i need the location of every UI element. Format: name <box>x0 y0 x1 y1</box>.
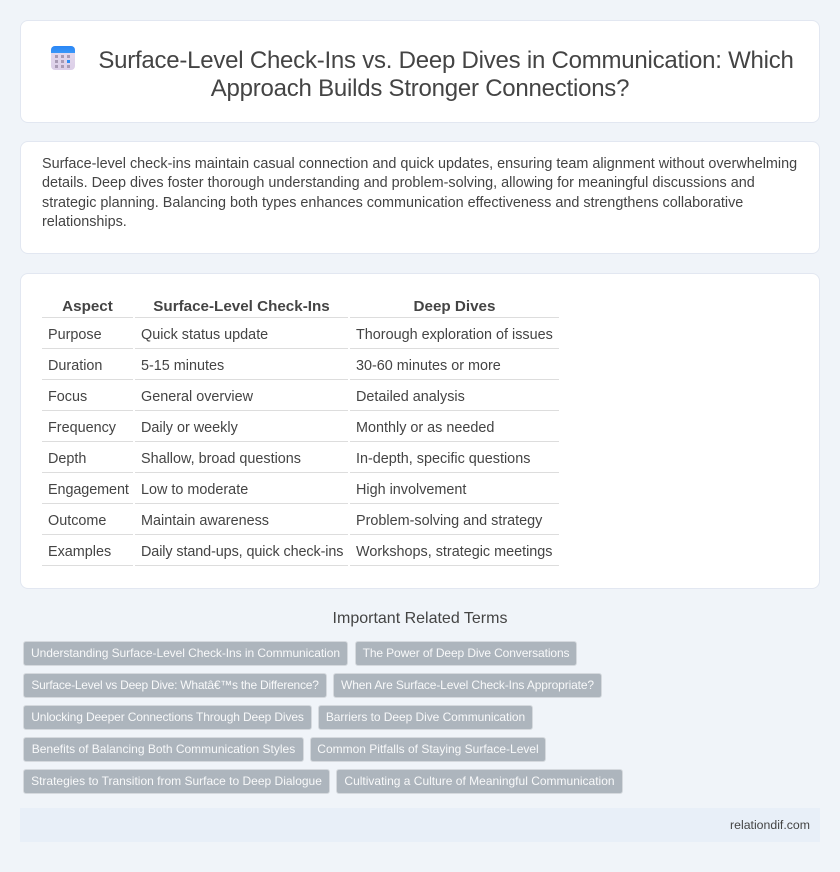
tag <box>336 769 623 794</box>
comparison table: Focus <box>48 389 87 405</box>
intro text: strategic planning. Balancing both types enhances communication effectiveness and strengthens collaborative <box>42 195 743 211</box>
intro text: details. Deep dives foster thorough understanding and problem-solving, allowing for meaningful discussions and <box>42 175 755 191</box>
heading: related terms: Important Related Terms <box>333 610 507 627</box>
tag: Surface-Level vs Deep Dive: Whatâ€™s the Difference? <box>31 678 319 692</box>
comparison table: Aspect <box>62 298 113 315</box>
tag <box>23 673 327 698</box>
panel: related term tags <box>23 641 623 794</box>
comparison table <box>42 298 559 566</box>
comparison table: Shallow, broad questions <box>141 451 301 467</box>
comparison table: Monthly or as needed <box>356 420 494 436</box>
footer source: relationdif.com <box>730 818 810 832</box>
tag <box>355 641 577 666</box>
comparison table: High involvement <box>356 482 466 498</box>
comparison table: Purpose <box>48 327 102 343</box>
tag <box>333 673 602 698</box>
comparison table: Deep Dives <box>414 298 495 315</box>
comparison table: Frequency <box>48 420 116 436</box>
comparison table: Low to moderate <box>141 482 248 498</box>
tag <box>23 737 304 762</box>
comparison table: Maintain awareness <box>141 513 269 529</box>
comparison table: Daily stand-ups, quick check-ins <box>141 544 343 560</box>
tag <box>23 705 312 730</box>
comparison table: Duration <box>48 358 102 374</box>
panel: introduction <box>20 141 820 254</box>
footer <box>20 808 820 842</box>
tag: Common Pitfalls of Staying Surface-Level <box>317 742 539 756</box>
tag: When Are Surface-Level Check-Ins Appropriate? <box>341 678 594 692</box>
title: Approach Builds Stronger Connections? <box>211 75 629 102</box>
tag: The Power of Deep Dive Conversations <box>363 646 569 660</box>
comparison table: Engagement <box>48 482 129 498</box>
intro text: relationships. <box>42 214 127 230</box>
comparison table: Outcome <box>48 513 106 529</box>
tag <box>310 737 546 762</box>
tag: Unlocking Deeper Connections Through Deep Dives <box>31 710 304 724</box>
panel: title header <box>20 20 820 123</box>
comparison table: 5-15 minutes <box>141 358 224 374</box>
comparison table: Workshops, strategic meetings <box>356 544 552 560</box>
tag <box>318 705 533 730</box>
icon: calendar <box>51 46 75 70</box>
comparison table: 30-60 minutes or more <box>356 358 501 374</box>
tag: Strategies to Transition from Surface to Deep Dialogue <box>31 774 322 788</box>
comparison table: Detailed analysis <box>356 389 465 405</box>
tag: Cultivating a Culture of Meaningful Communication <box>344 774 615 788</box>
comparison table: Quick status update <box>141 327 268 343</box>
comparison table: In-depth, specific questions <box>356 451 530 467</box>
comparison table: General overview <box>141 389 253 405</box>
comparison table: Thorough exploration of issues <box>356 327 553 343</box>
tag <box>23 769 330 794</box>
comparison table: Problem-solving and strategy <box>356 513 542 529</box>
tag <box>23 641 348 666</box>
panel: comparison table <box>20 273 820 589</box>
intro text: Surface-level check-ins maintain casual connection and quick updates, ensuring team alignment without overwhelming <box>42 156 797 172</box>
intro text <box>42 156 797 230</box>
comparison table: Examples <box>48 544 111 560</box>
tag: Understanding Surface-Level Check-Ins in Communication <box>31 646 340 660</box>
comparison table: Daily or weekly <box>141 420 238 436</box>
comparison table: Depth <box>48 451 86 467</box>
title <box>98 47 794 102</box>
title: Surface-Level Check-Ins vs. Deep Dives in Communication: Which <box>98 47 794 74</box>
comparison table: Surface-Level Check-Ins <box>153 298 330 315</box>
tag: Barriers to Deep Dive Communication <box>326 710 525 724</box>
tag: Benefits of Balancing Both Communication Styles <box>32 742 295 756</box>
